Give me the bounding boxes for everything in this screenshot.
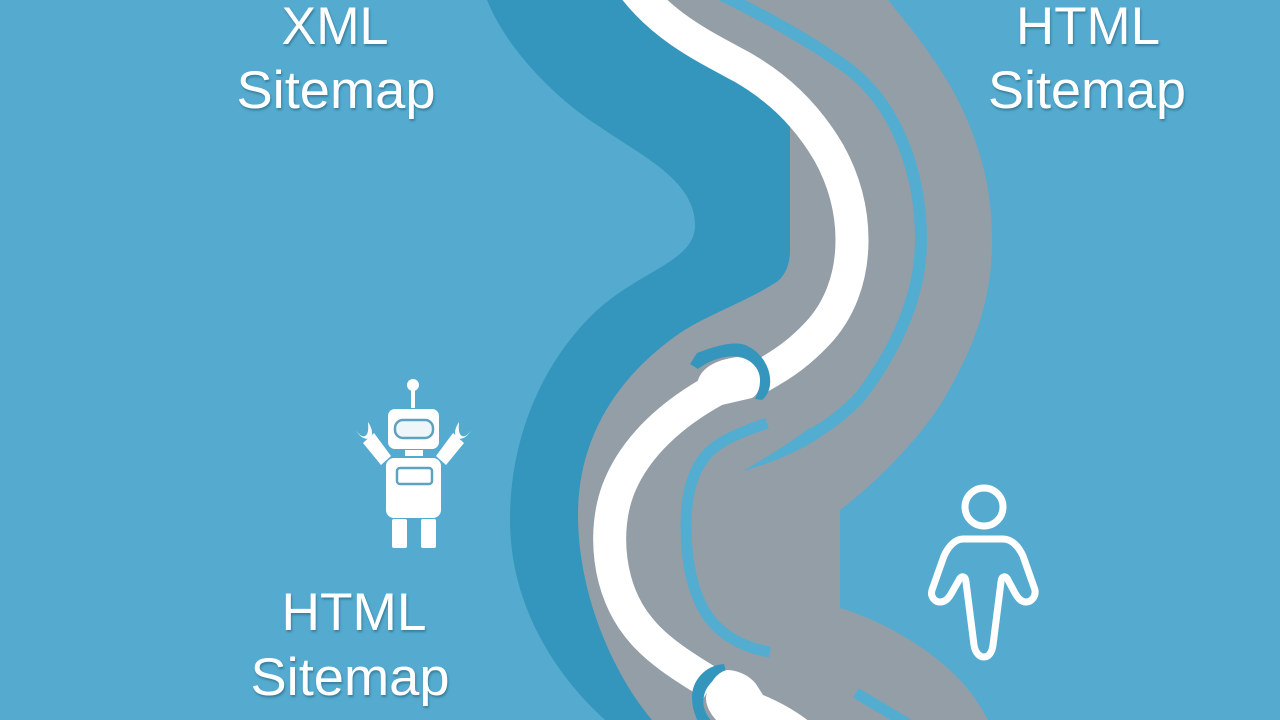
bottom road junction	[692, 664, 810, 720]
bottom teal stripe	[856, 693, 908, 720]
grey path band	[578, 0, 992, 720]
bottom junction dark arc	[692, 664, 726, 720]
upper teal stripe	[722, 0, 921, 471]
heading: XML Sitemap	[236, 0, 436, 120]
middle road junction	[690, 343, 770, 407]
dark blue river band	[487, 0, 800, 720]
heading: XML Sitemap: Sitemap	[236, 61, 436, 120]
heading: HTML Sitemap top right: Sitemap	[988, 61, 1186, 120]
junction dark arc	[690, 343, 770, 400]
lower white road	[610, 390, 715, 684]
icon: person outline	[932, 488, 1035, 657]
junction white cap	[690, 357, 760, 407]
lower inner teal stripe	[686, 423, 770, 652]
heading: HTML Sitemap bottom left: HTML	[282, 583, 426, 642]
heading: HTML Sitemap bottom left: Sitemap	[250, 648, 450, 707]
bottom junction white cap	[706, 670, 810, 720]
upper white road	[634, 0, 852, 377]
icon: robot	[356, 379, 471, 548]
heading: HTML Sitemap bottom left	[250, 583, 450, 707]
heading: HTML Sitemap top right	[988, 0, 1186, 120]
